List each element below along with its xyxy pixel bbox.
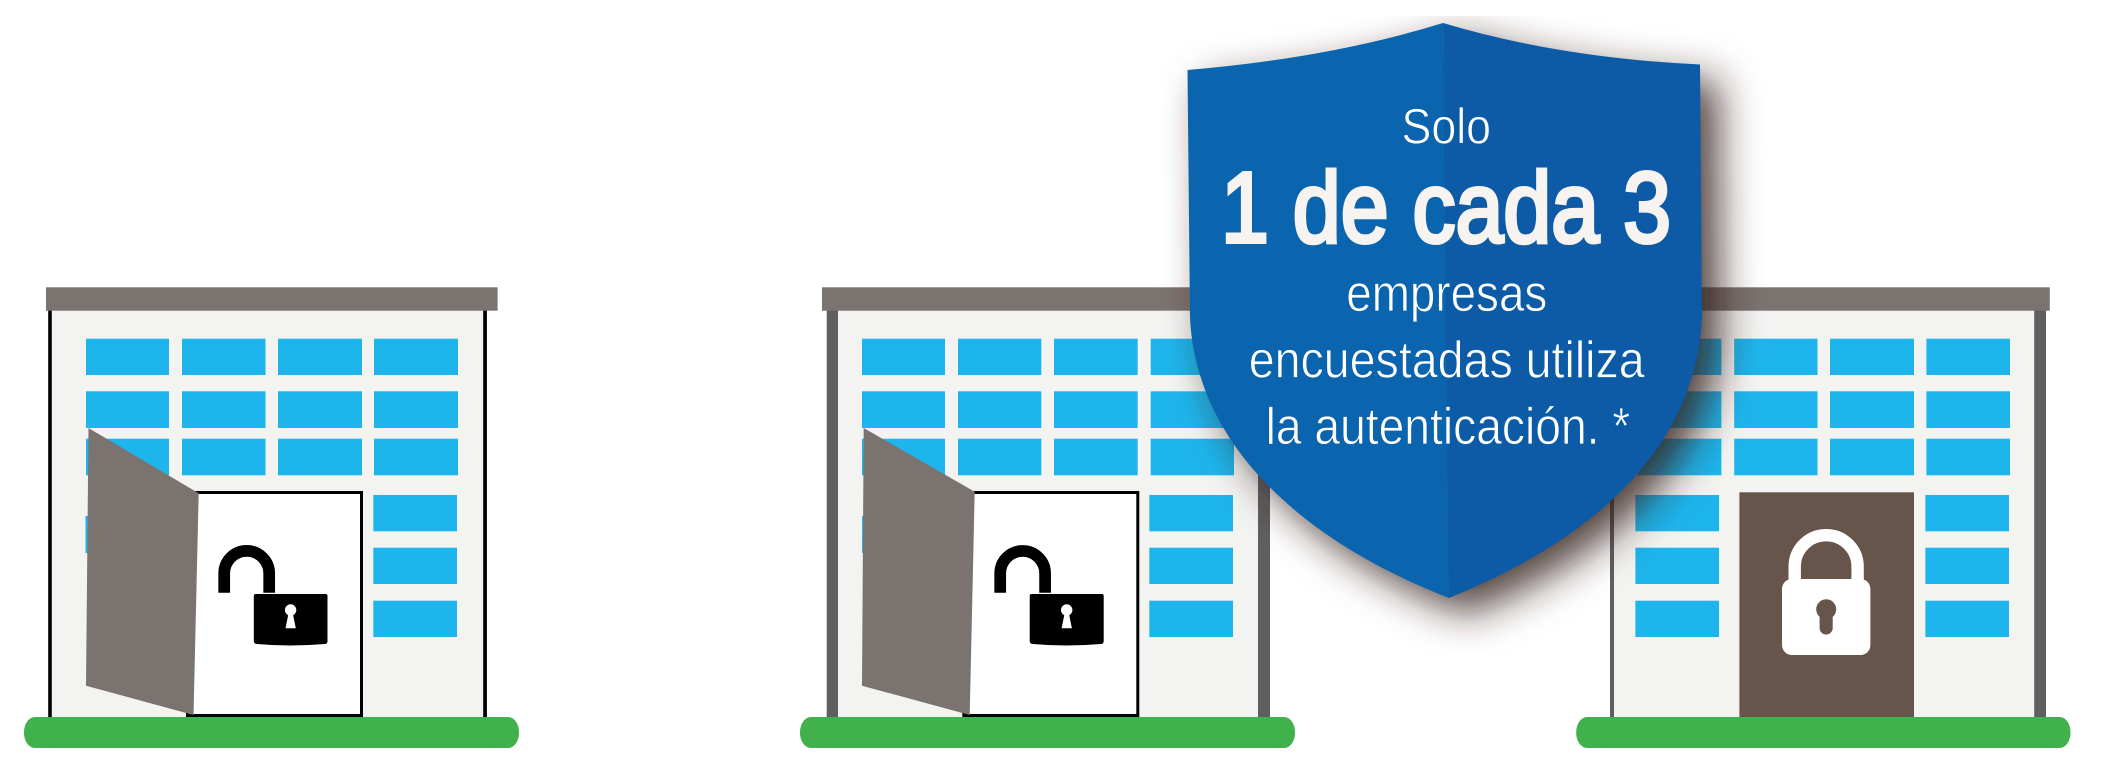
windows <box>862 339 1234 637</box>
roof <box>1598 287 2050 311</box>
ground <box>24 717 519 748</box>
wall <box>1614 310 2034 717</box>
building 3: locked door <box>1576 287 2070 748</box>
windows <box>1635 339 2010 637</box>
door opening <box>188 492 362 716</box>
wall <box>838 310 1258 717</box>
building 1: unlocked, open door <box>24 287 519 748</box>
text: encuestadas utiliza: encuestadas utiliza <box>1249 332 1645 390</box>
text: Solo: Solo <box>1402 99 1491 155</box>
ground <box>800 717 1295 748</box>
side walls <box>48 310 487 717</box>
windows <box>86 339 458 637</box>
building 2: unlocked, open door <box>800 287 1295 748</box>
side walls <box>1610 310 2046 717</box>
shield left half <box>1188 23 1449 598</box>
open door leaf <box>86 428 199 715</box>
ground <box>1576 717 2070 748</box>
wall <box>51 310 484 717</box>
icon: open padlock <box>224 551 328 646</box>
roof <box>46 287 498 311</box>
icon: open padlock <box>1000 551 1104 646</box>
side walls <box>827 310 1270 717</box>
closed door <box>1739 492 1914 717</box>
icon: closed padlock <box>1782 535 1870 655</box>
shield right half <box>1443 23 1702 598</box>
open door leaf <box>862 428 975 715</box>
roof <box>822 287 1274 311</box>
door opening <box>964 492 1138 716</box>
shield callout <box>1188 23 1702 598</box>
shield shadow <box>1188 23 1702 598</box>
text: empresas: empresas <box>1346 265 1547 323</box>
text: 1 de cada 3: 1 de cada 3 <box>1221 152 1671 264</box>
text: la autenticación. *: la autenticación. * <box>1266 398 1630 456</box>
